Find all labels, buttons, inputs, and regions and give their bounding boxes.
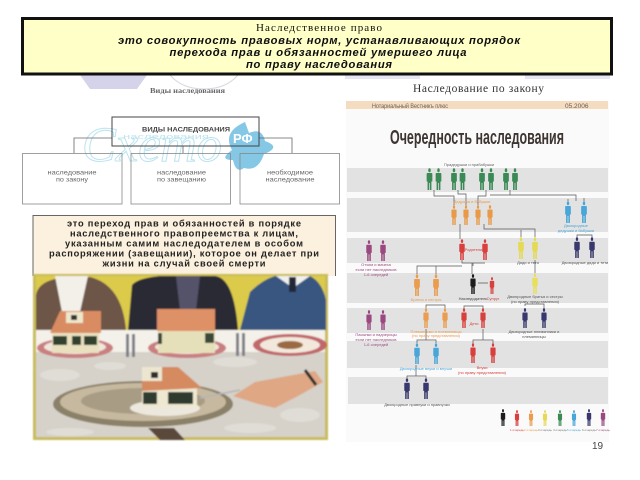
grey row bands — [347, 168, 608, 404]
large dish — [53, 381, 233, 440]
level: stepchildren: 1-6 очередей — [364, 342, 388, 347]
level: great-grandparents — [427, 162, 518, 190]
box: inheritance by will: наследование — [157, 170, 206, 176]
level: disabled dependents: если нет наследников — [356, 267, 396, 272]
watermark: Схето РФ: Схето — [82, 116, 222, 172]
panel: definition of inheritance by will: распоряжении (завещании), которое он делает при — [49, 248, 319, 258]
level: disabled dependents: Отчим и мачеха — [361, 262, 392, 267]
mottled table texture — [40, 357, 320, 436]
box: inheritance by law: наследование — [48, 170, 97, 176]
picture: houses on plates — [33, 274, 328, 440]
level: great-nephews — [400, 343, 452, 371]
house on large dish — [142, 367, 202, 407]
box: types of inheritance — [112, 117, 259, 146]
level: parents of the testator — [459, 239, 488, 260]
level: great-uncles and aunts: дедушки и бабушки — [558, 228, 594, 233]
header title: Наследственное право — [256, 22, 382, 34]
level: uncles and aunts — [517, 237, 539, 265]
box: inheritance by will — [131, 154, 230, 204]
level: great-nephews: Двоюродные внуки и внучки — [400, 366, 452, 371]
level: cousin nephews: Двоюродные племянники и — [509, 329, 559, 334]
diagram: types of inheritance — [22, 117, 340, 204]
magazine header strip: 05.2006 — [565, 103, 589, 110]
magazine header strip — [346, 101, 608, 110]
panel: definition of inheritance by will — [33, 216, 336, 276]
level: stepchildren — [355, 310, 397, 347]
right heading: inheritance by law: Наследование по закону — [413, 83, 544, 95]
level: nephews and nieces: Племянники и племянницы — [411, 329, 462, 334]
diagram caption: Виды наследования — [150, 87, 225, 95]
level: great-grandchildren — [384, 378, 450, 407]
house on first plate — [50, 311, 101, 353]
level: great-uncles and aunts: Двоюродные — [564, 223, 589, 228]
plates — [37, 334, 327, 358]
connector lines — [407, 190, 592, 378]
box: compulsory inheritance — [240, 154, 340, 204]
legend: inheritance order colours — [501, 409, 610, 432]
level: great-grandparents: Прадедушки и прабабушки — [444, 162, 494, 167]
level: nephews and nieces: (по праву представления) — [412, 333, 461, 338]
house on second plate — [157, 309, 215, 353]
header definition text: перехода прав и обязанностей умершего лица — [170, 47, 466, 59]
box: types of inheritance: ВИДЫ НАСЛЕДОВАНИЯ — [142, 126, 230, 134]
level: siblings — [411, 274, 441, 302]
level: grandparents: Дедушки и бабушки — [454, 199, 490, 204]
level: stepchildren: Пасынки и падчерицы — [355, 332, 397, 337]
box: inheritance by law: по закону — [56, 176, 89, 184]
legend: inheritance order colours: 4 очередь — [553, 428, 567, 432]
legend: inheritance order colours: 2 очередь — [524, 428, 538, 432]
legend: inheritance order colours: 1 очередь — [510, 428, 524, 432]
level: cousins once removed: Двоюродные дяди и тети — [562, 260, 608, 265]
panel: definition of inheritance by will: наследственного правопреемства к лицам, — [70, 228, 298, 238]
panel: definition of inheritance by will: это переход прав и обязанностей в порядке — [67, 218, 301, 228]
chart: order of inheritance — [346, 101, 610, 442]
woman in brown jacket — [36, 276, 126, 330]
man in dark suit — [128, 276, 238, 330]
background decorative shapes — [80, 75, 610, 89]
legend: inheritance order colours: 7 очередь — [596, 428, 610, 432]
level: cousin nephews: племянницы — [522, 334, 546, 339]
testator and spouse — [459, 274, 500, 301]
level: siblings: Братья и сестры — [411, 297, 441, 302]
panel: definition of inheritance by will: жизни на случай своей смерти — [102, 258, 266, 268]
box: compulsory inheritance: наследование — [266, 176, 315, 184]
level: cousins once removed — [562, 237, 608, 265]
level: cousins: Двоюродные братья и сестры — [507, 294, 563, 299]
level: cousins — [507, 273, 563, 304]
level: children: Дети — [470, 321, 478, 326]
level: great-uncles and aunts — [558, 201, 594, 233]
legend: inheritance order colours: 6 очередь — [582, 428, 596, 432]
level: parents of the testator: Родители — [465, 247, 482, 252]
magazine header strip: Нотариальный Вестникъ плюс — [372, 102, 449, 110]
level: great-grandchildren: Двоюродные правнуки и правнучки — [384, 402, 450, 407]
box: inheritance by law — [22, 154, 122, 204]
cutlery — [126, 333, 245, 357]
level: grandchildren: (по праву представления) — [458, 370, 507, 375]
panel: definition of inheritance by will: указанным самим наследодателем в особом — [65, 238, 303, 248]
watermark: Схето РФ: РФ — [233, 131, 253, 146]
level: grandparents — [451, 199, 493, 225]
box: inheritance by will: по завещанию — [157, 176, 206, 184]
level: stepchildren: если нет наследников — [356, 337, 396, 342]
testator and spouse: Супруг — [487, 296, 500, 301]
level: grandchildren: Внуки — [477, 365, 487, 370]
level: children — [461, 308, 486, 328]
level: grandchildren — [458, 343, 507, 375]
header definition text: по праву наследования — [246, 59, 392, 71]
level: cousins: (по праву представления) — [511, 299, 560, 304]
header definition text — [118, 35, 521, 71]
legend: inheritance order colours: 5 очередь — [567, 428, 581, 432]
box: types of inheritance: наследования — [123, 134, 209, 141]
legend: inheritance order colours: 3 очередь — [538, 428, 552, 432]
testator and spouse: Наследодатель — [459, 296, 487, 301]
page number: 19 — [592, 441, 604, 452]
level: disabled dependents — [356, 240, 396, 277]
man in blue sweater — [240, 276, 326, 330]
level: uncles and aunts: Дяди и тети — [517, 260, 539, 265]
level: disabled dependents: 1-6 очередей — [364, 272, 388, 277]
level: nephews and nieces — [411, 308, 462, 338]
hand with knife — [200, 370, 323, 408]
level: cousin nephews — [509, 308, 559, 339]
header panel: inheritance law definition — [22, 18, 612, 74]
box: compulsory inheritance: необходимое — [267, 168, 313, 176]
header definition text: это совокупность правовых норм, устанавливающих порядок — [118, 35, 521, 47]
